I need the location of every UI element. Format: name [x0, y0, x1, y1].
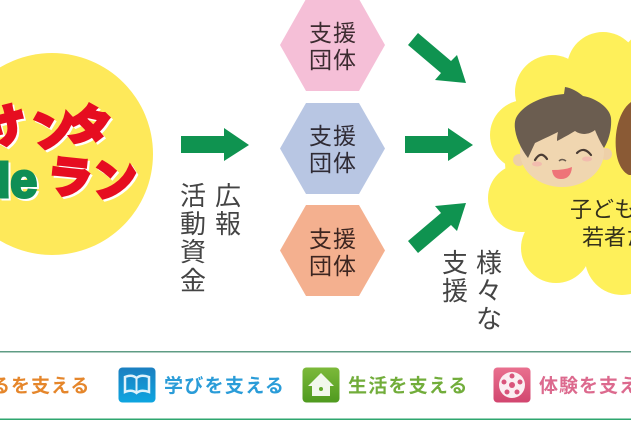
hexagon: pink support group: 団体 — [309, 47, 357, 73]
title: サンタ: ン — [27, 100, 82, 158]
label: 支援: 支 — [442, 248, 468, 278]
hexagon: orange support group — [280, 205, 385, 296]
title: ラン: ラ — [45, 152, 94, 205]
label: 広報: 広 — [215, 181, 241, 211]
label: 様々な: な — [476, 304, 502, 334]
hexagon: pink support group — [280, 0, 385, 91]
hexagon: pink support group: 支援 — [309, 20, 357, 46]
label: 広報: 報 — [215, 209, 241, 239]
label: 活動資金: 動 — [180, 209, 206, 239]
title: ラン — [45, 152, 139, 206]
legend: green label: 生活を支える — [348, 375, 469, 397]
label: 広報 — [215, 181, 241, 239]
title: ラン: ン — [92, 155, 139, 206]
legend: pink icon ball — [494, 368, 530, 402]
title: サンタ: タ — [62, 99, 115, 156]
title: サンタ — [0, 99, 115, 158]
label: 様々な: 々 — [476, 276, 502, 306]
label: 支援: 援 — [442, 276, 468, 306]
label: 支援 — [442, 248, 468, 306]
hexagon: blue support group: 団体 — [309, 150, 357, 176]
legend: blue icon book — [118, 368, 156, 402]
arrow: diagonal down — [408, 33, 466, 83]
hexagon: blue support group: 支援 — [309, 123, 357, 149]
cloud: children and youth — [488, 30, 631, 295]
label: 活動資金: 資 — [180, 237, 206, 267]
hexagon: blue support group — [280, 103, 385, 194]
icon: second child hair — [616, 102, 631, 175]
arrow: diagonal up — [408, 203, 466, 253]
rule: top of legend — [0, 351, 631, 352]
legend: green icon house — [302, 368, 340, 402]
legend: blue label: 学びを支える — [164, 374, 285, 397]
label: 活動資金 — [180, 181, 206, 296]
label: 様々な: 様 — [476, 248, 502, 278]
rule: bottom of legend — [0, 418, 631, 420]
logo: yellow circle with title — [0, 53, 153, 255]
label: 様々な — [476, 248, 502, 334]
arrow: horizontal — [405, 128, 473, 161]
hexagon: orange support group: 支援 — [309, 226, 357, 252]
label: 活動資金: 金 — [180, 266, 206, 296]
label: 活動資金: 活 — [180, 181, 206, 211]
hexagon: orange support group: 団体 — [309, 253, 357, 279]
icon: boy face — [513, 87, 612, 187]
text: children and youth — [570, 197, 631, 250]
arrow: activity funds to groups — [181, 128, 249, 161]
